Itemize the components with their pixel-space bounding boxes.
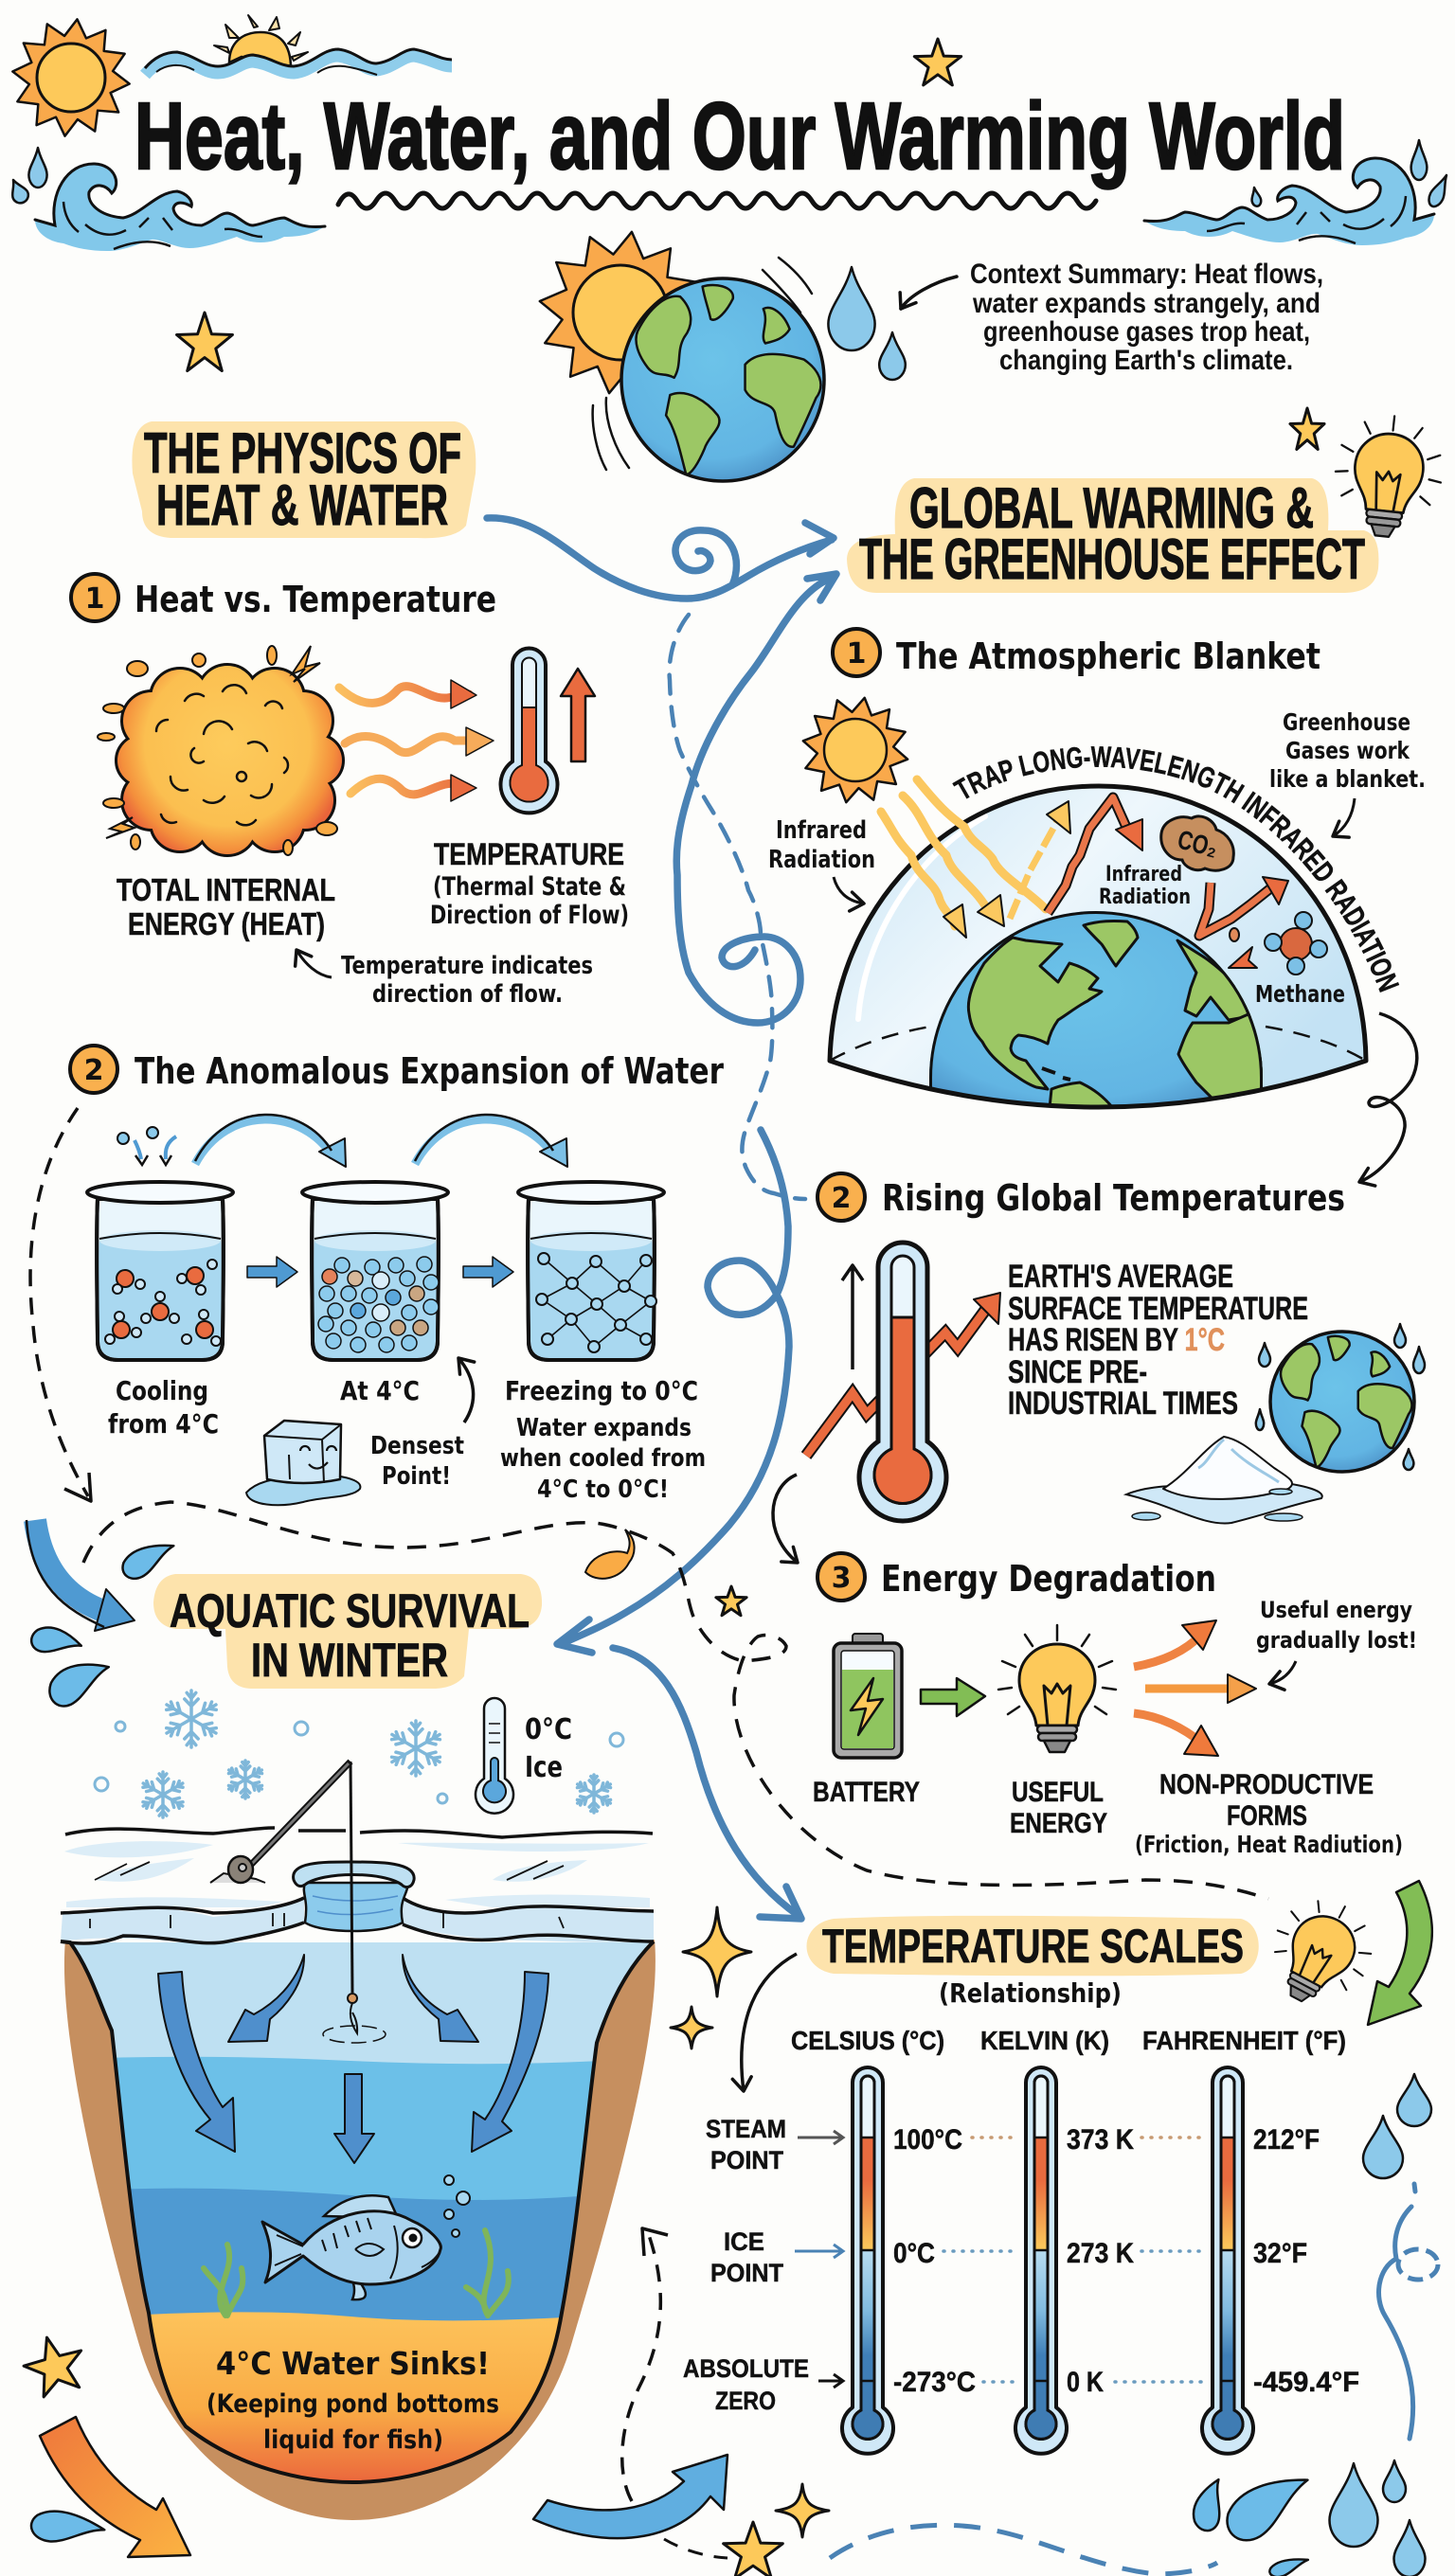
rising dotted arrow <box>1010 801 1070 919</box>
subtitle: relationship: (Relationship) <box>939 1977 1122 2009</box>
reflected radiation arrow <box>1048 797 1142 913</box>
orange arrows: energy loss <box>1134 1620 1256 1756</box>
icon: small earth <box>1270 1332 1414 1472</box>
note: temperature indicates direction of flow: direction of flow. <box>372 980 563 1009</box>
beaker labels: Cooling <box>116 1375 208 1406</box>
earth basin <box>64 1940 656 2520</box>
right radiation arrows <box>1199 877 1288 968</box>
dome illustration <box>830 786 1366 1127</box>
heading: the physics of heat and water: HEAT & WATER <box>156 474 448 537</box>
icon: useful energy bulb <box>998 1625 1116 1752</box>
sinking arrows <box>158 1955 548 2163</box>
arrow: winding connector upper <box>676 574 836 1023</box>
ice hole <box>294 1862 414 1931</box>
small arrow to orange arrows <box>1269 1661 1296 1684</box>
arrow: to water drop <box>901 277 957 309</box>
scale values: 373 K <box>1067 2124 1134 2156</box>
row labels: POINT <box>710 2259 783 2287</box>
labels in dome: Greenhouse <box>1283 708 1410 736</box>
methane molecule <box>1265 912 1327 975</box>
beaker labels: when cooled from <box>500 1444 706 1473</box>
heading: aquatic survival in winter: AQUATIC SURVIVAL <box>170 1584 530 1637</box>
icon: blue splash drops <box>27 1543 178 1708</box>
scale values: -459.4°F <box>1253 2367 1359 2398</box>
icon: star by bulb <box>1290 408 1324 449</box>
beaker labels: Point! <box>382 1462 451 1491</box>
blue squiggle right <box>1379 2184 1415 2439</box>
dashed loop right <box>1398 2249 1438 2280</box>
icon: smiling ice cube <box>246 1421 360 1505</box>
icon: star left <box>177 313 232 371</box>
dotted guide lines <box>943 2138 1208 2382</box>
beaker 1: cooling molecules <box>87 1182 233 1360</box>
scale values: 100°C <box>893 2124 962 2156</box>
seaweed and bubbles <box>204 2175 509 2316</box>
icon: right wave <box>1144 158 1434 245</box>
beaker labels: At 4°C <box>340 1375 420 1406</box>
note: temperature indicates direction of flow: Temperature indicates <box>341 952 593 980</box>
icon: battery <box>834 1634 902 1758</box>
row labels: POINT <box>710 2146 783 2174</box>
beaker labels: from 4°C <box>108 1408 219 1440</box>
text: water sinks: liquid for fish) <box>263 2425 443 2455</box>
section: heat vs temperature heading <box>71 574 496 621</box>
dashed curve bottom <box>664 2539 728 2558</box>
energy labels: ENERGY <box>1010 1808 1107 1839</box>
water layers <box>74 1942 650 2480</box>
energy labels: NON-PRODUCTIVE <box>1159 1769 1374 1800</box>
labels in dome: Methane <box>1255 980 1345 1008</box>
arrow: battery to bulb <box>921 1678 985 1716</box>
heading: global warming and the greenhouse effect <box>847 476 1378 593</box>
label: 0C ice <box>525 1713 572 1784</box>
row labels: STEAM <box>706 2115 786 2143</box>
curved arrows above beakers <box>195 1115 567 1167</box>
beaker labels: 4°C to 0°C! <box>537 1476 669 1504</box>
context summary <box>970 259 1323 376</box>
heading: aquatic survival in winter: IN WINTER <box>251 1634 448 1687</box>
arrow: physics to global warming with spiral <box>487 518 834 599</box>
arrow to energy degradation <box>773 1475 798 1563</box>
text: earth's average: EARTH'S AVERAGE <box>1008 1259 1233 1295</box>
arrowhead of dashed arrow bottom <box>642 2228 668 2256</box>
section: anomalous expansion heading: 2 <box>84 1054 103 1087</box>
row labels: ICE <box>724 2227 764 2256</box>
icon: snowflakes <box>95 1690 623 1817</box>
dashed arrow down left <box>30 1108 88 1496</box>
section: atmospheric blanket heading: 1 <box>847 637 866 671</box>
energy labels: BATTERY <box>813 1777 920 1808</box>
arrow: banner to scale <box>742 1954 797 2091</box>
dashed swirl connector <box>83 1502 1268 1899</box>
icon: rising sun over wave <box>145 15 452 75</box>
black up arrow <box>842 1265 863 1369</box>
title underline squiggle <box>338 193 1096 208</box>
text: earth's average: SURFACE TEMPERATURE <box>1008 1291 1308 1327</box>
section: energy degradation heading: 3 <box>832 1562 851 1595</box>
CO2 cloud <box>1161 816 1233 870</box>
scale values: 0°C <box>893 2238 935 2269</box>
text: earth's average: SINCE PRE- <box>1008 1354 1147 1390</box>
loop arrow to rising temperatures <box>1359 1013 1417 1182</box>
labels in dome: Infrared <box>776 816 867 845</box>
globe under dome <box>929 911 1263 1104</box>
bottom stars <box>671 1907 829 2576</box>
arrow: densest point <box>458 1358 474 1422</box>
arrowheads on incoming radiation <box>943 895 1004 938</box>
scale values: 32°F <box>1253 2238 1307 2269</box>
icon: sun behind earth <box>529 221 712 404</box>
small drops around earth <box>1256 1324 1425 1470</box>
arrow: big blue top left <box>27 1520 135 1631</box>
context summary: greenhouse gases trop heat, <box>983 316 1310 348</box>
label: 0C ice: 0°C <box>525 1713 572 1746</box>
energy labels: USEFUL <box>1012 1777 1104 1808</box>
pond outline <box>61 1941 654 2482</box>
heading: temperature scales: TEMPERATURE SCALES <box>822 1920 1244 1973</box>
arrow: orange bottom left <box>40 2417 190 2557</box>
note: useful energy lost: gradually lost! <box>1256 1627 1417 1654</box>
row labels: ABSOLUTE <box>683 2354 809 2383</box>
beaker 2: dense molecules at 4C <box>302 1182 448 1360</box>
ice surface <box>61 1828 654 1943</box>
icon: small orange leaf <box>585 1530 635 1579</box>
thermometer: celsius <box>842 2067 893 2454</box>
fish <box>262 2195 440 2299</box>
icon: heat burst <box>98 646 342 855</box>
dashed arrow bottom center <box>622 2235 660 2501</box>
thermometer: kelvin <box>1015 2067 1067 2454</box>
context summary: water expands strangely, and <box>972 288 1320 319</box>
note: useful energy lost <box>1256 1597 1417 1654</box>
section: atmospheric blanket heading <box>833 629 1320 677</box>
labels in dome: Radiation <box>768 846 875 874</box>
beaker labels <box>108 1375 706 1504</box>
pond illustration <box>57 1762 663 2520</box>
arrow: aquatic survival to temperature scales <box>613 1648 801 1919</box>
icon: melting ice <box>1126 1437 1322 1523</box>
thermometer: fahrenheit <box>1202 2067 1253 2454</box>
icon: water drops <box>828 267 906 380</box>
arrow: blue bottom center <box>533 2455 728 2538</box>
icon: bottom left star <box>18 2330 90 2400</box>
right drops <box>1363 2074 1431 2178</box>
small black arrows in dome panel <box>834 798 1355 903</box>
icon: small thermometer <box>476 1698 513 1814</box>
label: 0C ice: Ice <box>525 1751 563 1784</box>
labels in dome: Radiation <box>1099 886 1191 909</box>
icon: light bulb top right <box>1329 411 1447 542</box>
labels in dome: Infrared <box>1105 863 1182 886</box>
beaker labels: Densest <box>370 1432 464 1460</box>
row arrows <box>795 2131 843 2388</box>
section: rising global temperatures heading <box>817 1173 1345 1221</box>
arrow: winding connector lower to aquatic survival <box>557 1130 789 1653</box>
label: temperature: TEMPERATURE <box>434 837 624 871</box>
context summary: Context Summary: Heat flows, <box>970 259 1323 290</box>
icon: spray drops <box>6 140 1453 209</box>
bottom right drops <box>1184 2460 1425 2576</box>
heading: aquatic survival in winter <box>153 1574 542 1689</box>
labels in dome <box>768 708 1426 1008</box>
icon: sun in dome panel <box>794 689 917 812</box>
section: atmospheric blanket heading: The Atmospheric Blanket <box>896 635 1320 677</box>
dashed connector blue <box>670 615 805 1199</box>
labels in dome: Gases work <box>1285 737 1410 764</box>
zigzag rising arrow <box>806 1305 989 1456</box>
column headings: CELSIUS (°C) <box>791 2026 944 2055</box>
icon: bottom left drop <box>27 2502 106 2558</box>
heading: the physics of heat and water: THE PHYSICS OF <box>144 421 461 485</box>
dome outline <box>830 786 1366 1107</box>
arrowhead zigzag <box>974 1293 1000 1324</box>
energy labels <box>813 1769 1403 1858</box>
heading: the physics of heat and water <box>132 421 476 538</box>
wavy heat arrows <box>339 687 478 795</box>
note: useful energy lost: Useful energy <box>1260 1597 1412 1623</box>
dashed blue bottom <box>830 2525 1217 2574</box>
text: water sinks: 4°C Water Sinks! <box>216 2345 490 2382</box>
fishing rod <box>210 1762 386 2043</box>
section: anomalous expansion heading: The Anomalous Expansion of Water <box>135 1050 724 1092</box>
text: earth's average: INDUSTRIAL TIMES <box>1008 1386 1238 1422</box>
column headings <box>791 2026 1346 2055</box>
arrows between beakers <box>247 1257 513 1287</box>
icon: small star <box>716 1586 746 1616</box>
section: heat vs temperature heading: Heat vs. Temperature <box>135 579 496 620</box>
icon: tilted bulb <box>1253 1884 1388 2021</box>
energy labels: FORMS <box>1227 1800 1307 1832</box>
arrowhead of dashed arrow <box>64 1473 91 1501</box>
incoming radiation arrows <box>881 779 1046 926</box>
beaker labels: Freezing to 0°C <box>505 1375 698 1406</box>
section: rising global temperatures heading: 2 <box>832 1182 851 1215</box>
text: earth's average: HAS RISEN BY 1°C <box>1008 1322 1225 1358</box>
scale values: -273°C <box>893 2367 976 2398</box>
section: rising global temperatures heading: Rising Global Temperatures <box>882 1177 1345 1219</box>
label: total internal energy <box>117 872 335 941</box>
column headings: KELVIN (K) <box>980 2026 1109 2055</box>
beaker labels: Water expands <box>516 1414 692 1442</box>
row labels: ZERO <box>715 2387 776 2415</box>
note: temperature indicates direction of flow <box>296 950 593 1009</box>
icon: earth globe <box>621 278 824 481</box>
section: heat vs temperature heading: 1 <box>85 582 104 616</box>
arrowheads on heat arrows <box>451 680 494 801</box>
column headings: FAHRENHEIT (°F) <box>1142 2026 1346 2055</box>
motion lines <box>593 258 812 470</box>
section: energy degradation heading <box>817 1553 1216 1601</box>
curved label: trap long-wavelength infrared radiation: TRAP LONG-WAVELENGTH INFRARED RADIATION <box>952 746 1400 993</box>
section: energy degradation heading: Energy Degradation <box>881 1558 1216 1600</box>
context summary: changing Earth's climate. <box>999 345 1293 376</box>
label: total internal energy: TOTAL INTERNAL <box>117 872 335 907</box>
scale values: 0 K <box>1067 2367 1104 2398</box>
cooling drops icon <box>117 1127 176 1165</box>
scale values: 212°F <box>1253 2124 1320 2156</box>
row labels <box>683 2115 809 2415</box>
text: earth's average <box>1008 1259 1308 1422</box>
heading: temperature scales <box>807 1916 1259 1976</box>
label: temperature: (Thermal State & <box>433 872 626 902</box>
icon: up arrow <box>561 669 595 761</box>
big thermometer <box>859 1243 946 1521</box>
text: water sinks: (Keeping pond bottoms <box>207 2389 499 2419</box>
scale values <box>893 2124 1359 2398</box>
text: water sinks <box>207 2345 499 2455</box>
scale values: 273 K <box>1067 2238 1134 2269</box>
CO2 cloud: CO₂ <box>1175 825 1220 863</box>
icon: sun top left <box>7 13 135 142</box>
label: total internal energy: ENERGY (HEAT) <box>128 906 325 941</box>
icon: left wave <box>35 164 325 251</box>
icon: star top <box>914 39 961 85</box>
icon: thermometer heat <box>500 648 558 813</box>
section: anomalous expansion heading <box>70 1046 724 1093</box>
beaker 3: ice lattice <box>518 1182 664 1360</box>
label: temperature: Direction of Flow) <box>430 901 629 930</box>
arrow: green curved <box>1368 1881 1432 2025</box>
labels in dome: like a blanket. <box>1269 765 1426 793</box>
label: temperature <box>430 837 629 930</box>
